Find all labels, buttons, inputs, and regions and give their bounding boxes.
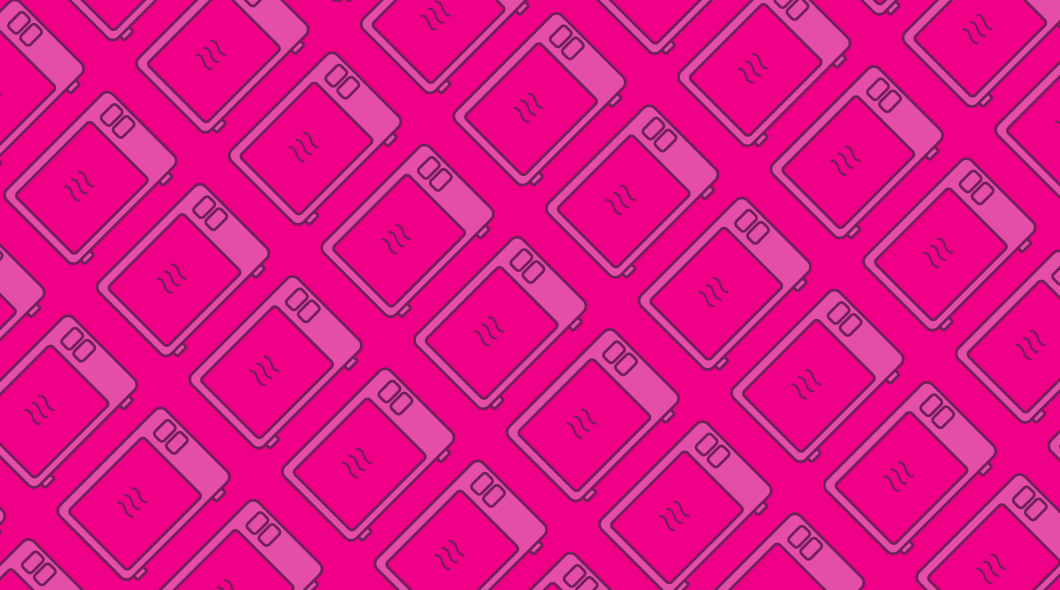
microwave icon: [860, 155, 1043, 338]
microwave icon: [728, 287, 911, 469]
microwave icon: [0, 313, 144, 495]
microwave icon: [900, 0, 1060, 114]
microwave icon: [821, 379, 1003, 561]
microwave icon: [451, 10, 633, 193]
microwave icon: [992, 24, 1060, 206]
microwave icon: [583, 0, 765, 61]
microwave icon: [464, 550, 647, 590]
microwave icon: [675, 0, 858, 153]
microwave icon: [372, 458, 554, 590]
microwave icon: [0, 536, 105, 590]
microwave icon: [636, 195, 818, 377]
microwave icon: [0, 0, 91, 179]
microwave icon: [265, 0, 448, 8]
microwave icon: [504, 326, 686, 509]
microwave icon: [41, 0, 223, 48]
microwave icon: [1006, 563, 1060, 590]
microwave icon: [0, 444, 12, 590]
microwave icon: [94, 181, 276, 363]
microwave icon: [133, 0, 316, 140]
microwave icon: [319, 142, 501, 324]
microwave icon: [768, 63, 950, 246]
microwave icon: [1046, 340, 1060, 522]
microwave icon: [596, 418, 779, 590]
microwave icon: [55, 405, 237, 587]
microwave icon: [1, 89, 184, 271]
microwave icon: [914, 471, 1060, 590]
microwave icon: [689, 511, 871, 590]
microwave icon: [147, 497, 330, 590]
microwave icon: [226, 50, 408, 232]
microwave icon: [0, 220, 52, 403]
microwave icon: [411, 234, 594, 416]
microwave icon: [240, 589, 422, 590]
microwave icon: [279, 365, 462, 548]
microwave icon: [953, 248, 1060, 430]
microwave icon: [807, 0, 990, 22]
microwave icon: [358, 0, 540, 100]
microwave icon: [543, 102, 726, 285]
microwave icon: [187, 273, 369, 456]
